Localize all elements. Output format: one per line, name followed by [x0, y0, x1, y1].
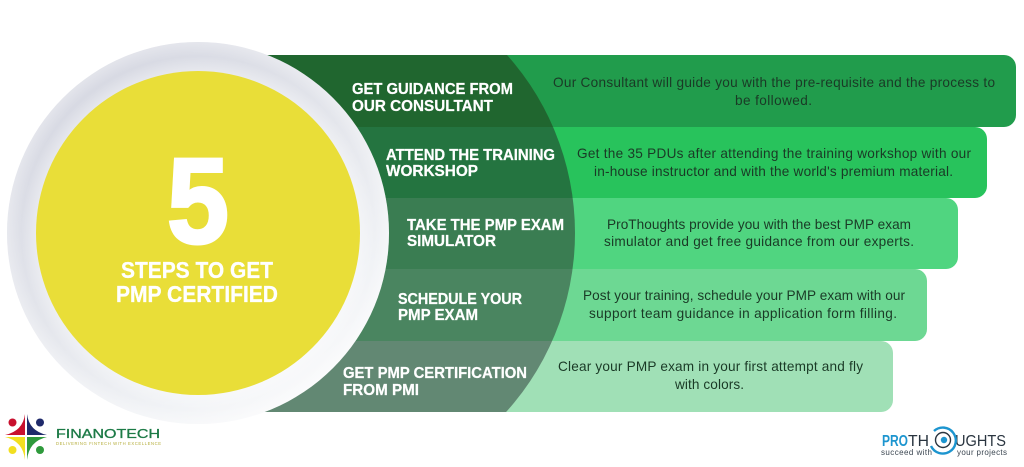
- description: step 3: [604, 217, 914, 249]
- panel: step bars: [270, 55, 1016, 412]
- title: [116, 257, 278, 307]
- step 3 bar: [300, 198, 958, 269]
- band 2: [357, 127, 573, 198]
- logo: Finanotech: [5, 414, 161, 460]
- band 5: [264, 341, 552, 412]
- tagline: DELIVERING FINTECH WITH EXCELLENCE: [56, 441, 161, 446]
- heading: step 5: GET PMP CERTIFICATION: [343, 365, 527, 382]
- heading: step 2: ATTEND THE TRAINING: [386, 147, 555, 164]
- heading: step 3: [407, 217, 564, 250]
- tagline: succeed with: [881, 448, 932, 457]
- white ring: [7, 42, 389, 424]
- heading: step 1: OUR CONSULTANT: [352, 98, 493, 115]
- description: step 1: be followed.: [735, 93, 812, 108]
- heading: step 1: [352, 81, 513, 115]
- heading: step 2: WORKSHOP: [386, 163, 478, 180]
- step 1 bar: [270, 55, 1016, 127]
- description: step 3: simulator and get free guidance from our experts.: [604, 234, 914, 249]
- wordmark: [882, 433, 1006, 450]
- band 4: [356, 269, 572, 341]
- step 2 bar: [300, 127, 987, 198]
- description: step 5: Clear your PMP exam in your first attempt and fly: [558, 359, 863, 374]
- heading: step 3: SIMULATOR: [407, 233, 496, 250]
- icon: target: [931, 428, 956, 454]
- heading: step 3: TAKE THE PMP EXAM: [407, 217, 564, 234]
- description: step 5: [558, 359, 863, 392]
- step 5 bar: [300, 341, 893, 412]
- band 1: [267, 55, 553, 127]
- heading: step 5: [343, 365, 527, 399]
- description: step 2: [577, 146, 971, 179]
- heading: step 4: PMP EXAM: [398, 307, 478, 324]
- number 5: 5: [167, 133, 229, 269]
- logo: ProThoughts: [881, 428, 1007, 457]
- panel: central circle: [7, 42, 389, 424]
- step 4 bar: [300, 269, 927, 341]
- icon: four-colour figure mark: [5, 414, 47, 460]
- description: step 1: Our Consultant will guide you with the pre-requisite and the process to: [553, 75, 995, 90]
- title: PMP CERTIFIED: [116, 281, 278, 307]
- heading: step 2: [386, 147, 555, 180]
- description: step 4: support team guidance in application form filling.: [589, 306, 897, 321]
- description: step 2: Get the 35 PDUs after attending the training workshop with our: [577, 146, 971, 161]
- wordmark: TH: [908, 433, 929, 450]
- title: STEPS TO GET: [121, 257, 273, 283]
- tagline: [881, 448, 1007, 457]
- wordmark: UGHTS: [955, 433, 1006, 450]
- wordmark: PRO: [882, 433, 908, 450]
- description: step 3: ProThoughts provide you with the best PMP exam: [607, 217, 911, 232]
- panel: dark heading bands: [264, 55, 575, 412]
- heading: step 5: FROM PMI: [343, 382, 419, 399]
- description: step 4: [583, 288, 905, 321]
- ring shading: [7, 42, 389, 424]
- heading: step 4: SCHEDULE YOUR: [398, 291, 522, 308]
- description: step 2: in-house instructor and with the world's premium material.: [594, 164, 953, 179]
- description: step 1: [553, 75, 995, 108]
- yellow disc: [36, 71, 360, 395]
- description: step 5: with colors.: [674, 377, 744, 392]
- band 3: [386, 198, 575, 269]
- heading: step 4: [398, 291, 522, 324]
- tagline: your projects: [957, 448, 1007, 457]
- heading: step 1: GET GUIDANCE FROM: [352, 81, 513, 98]
- wordmark: FINANOTECH: [56, 427, 160, 441]
- description: step 4: Post your training, schedule your PMP exam with our: [583, 288, 905, 303]
